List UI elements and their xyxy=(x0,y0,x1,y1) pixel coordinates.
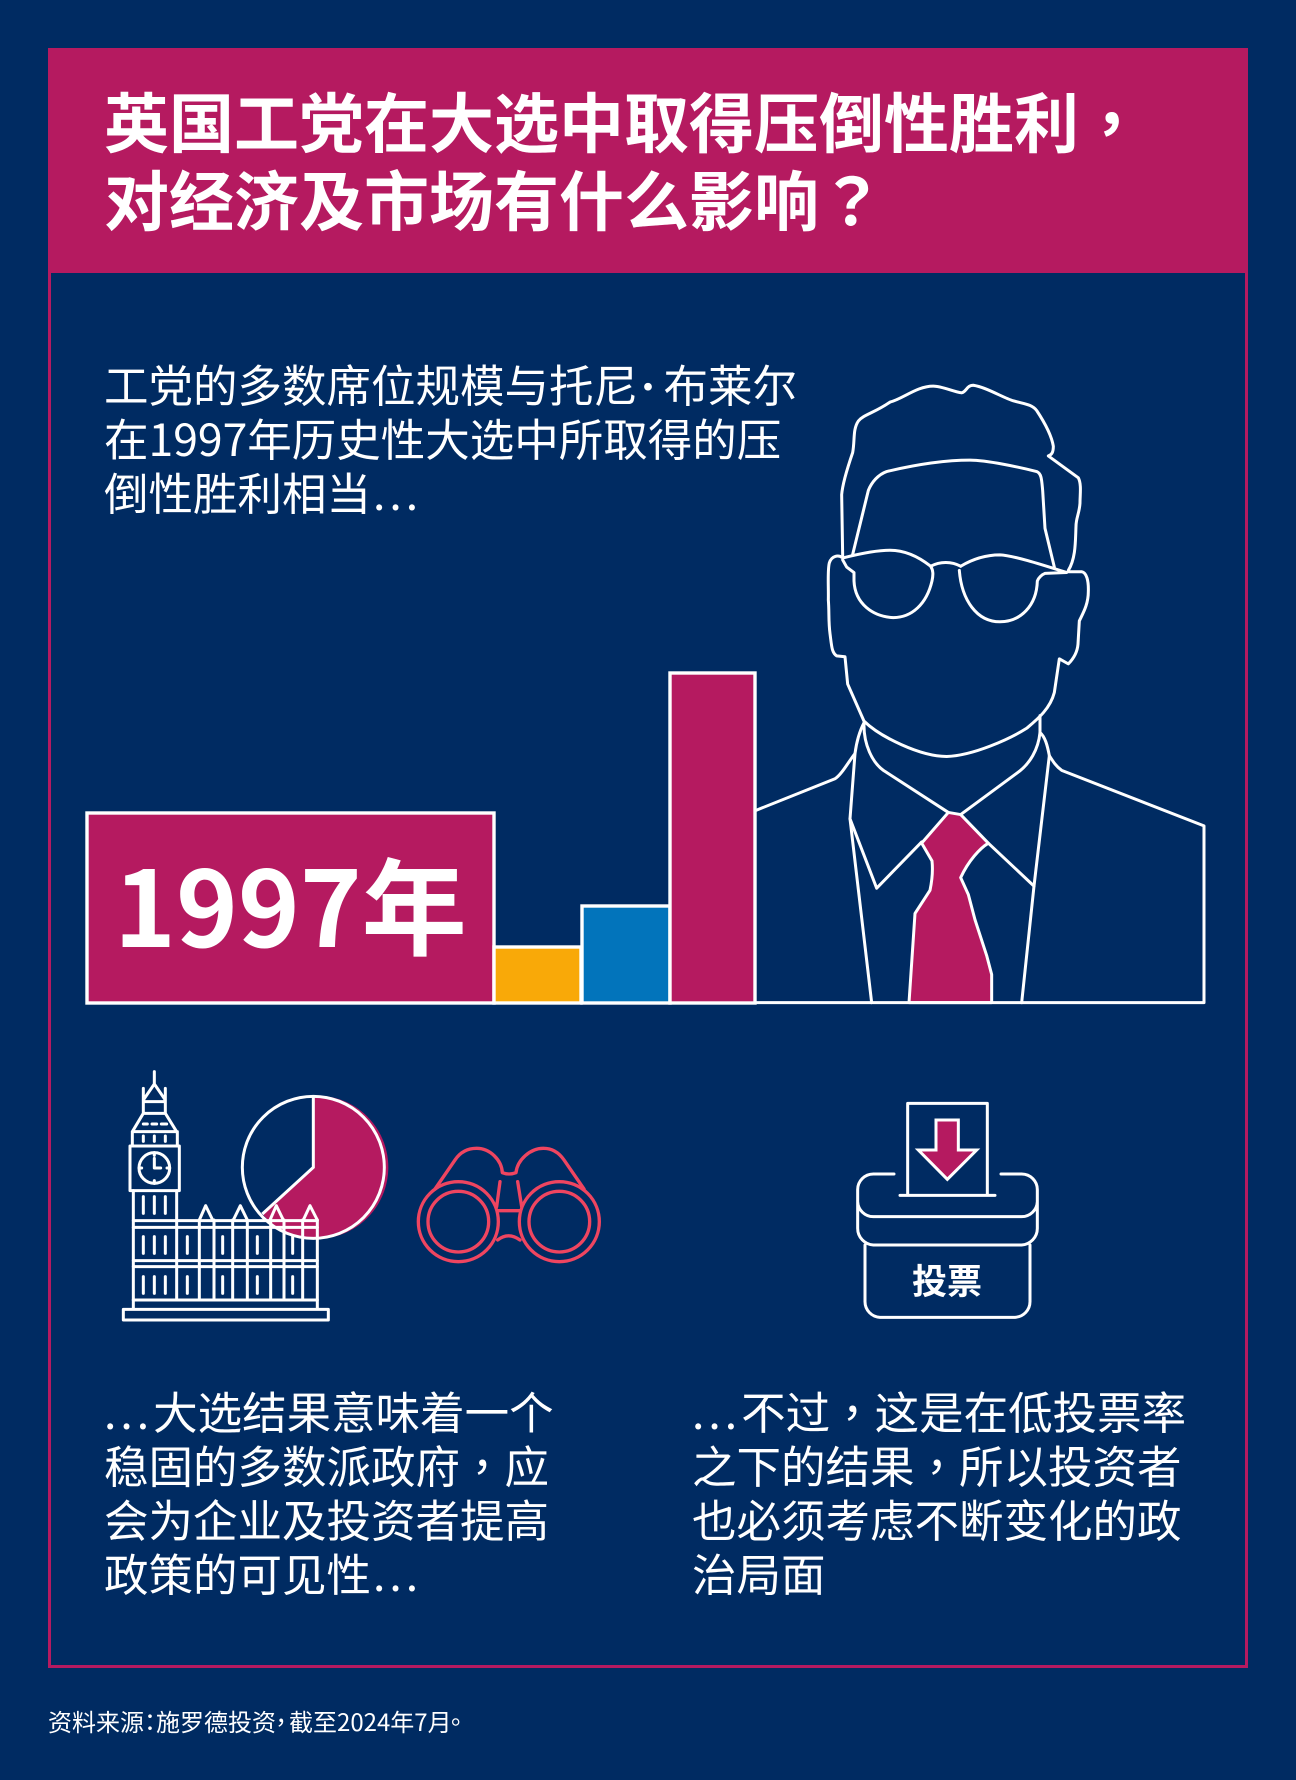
text block: left column: ...大选结果意味着一个 xyxy=(104,1377,554,1442)
text block: right column xyxy=(692,1377,1186,1604)
source note: 。 xyxy=(444,1703,468,1738)
bar: orange xyxy=(494,947,581,1003)
icon: pie chart xyxy=(242,1096,388,1239)
bar: magenta xyxy=(670,673,755,1003)
text block: left column: 会为企业及投资者提高 xyxy=(104,1485,549,1550)
text block: right column: ...不过，这是在低投票率 xyxy=(692,1377,1186,1442)
text block: right column: 之下的结果，所以投资者 xyxy=(692,1431,1182,1496)
title: 英国工党在大选中取得压倒性胜利， xyxy=(104,72,1144,166)
text block: intro xyxy=(104,350,797,523)
icon: ballot box xyxy=(858,1103,1037,1317)
bar chart: 1997 seats xyxy=(87,673,755,1003)
text block: intro: 倒性胜利相当... xyxy=(104,458,422,523)
text block: left column xyxy=(104,1377,554,1604)
text block: intro: 布莱尔 xyxy=(664,350,797,415)
text block: right column: 治局面 xyxy=(692,1539,826,1604)
source note: 资料来源 xyxy=(48,1703,144,1738)
source note: ： xyxy=(138,1703,162,1738)
source note: 截至2024年7月 xyxy=(289,1703,452,1738)
title xyxy=(104,72,1144,244)
source note: 施罗德投资 xyxy=(156,1703,276,1738)
source note: ， xyxy=(269,1703,293,1738)
header banner xyxy=(48,48,1248,273)
text block: intro: 工党的多数席位规模与托尼 xyxy=(104,350,638,415)
title: 对经济及市场有什么影响？ xyxy=(104,150,884,244)
icon: ballot paper with arrow xyxy=(900,1103,995,1195)
icon: Big Ben and parliament xyxy=(123,1072,328,1320)
text block: left column: 政策的可见性... xyxy=(104,1539,422,1604)
text block: intro: · xyxy=(630,359,666,411)
bar: 1997 label box xyxy=(87,813,494,1003)
illustration: man with glasses and tie xyxy=(755,385,1204,1003)
text block: left column: 稳固的多数派政府，应 xyxy=(104,1431,549,1496)
text block: right column: 也必须考虑不断变化的政 xyxy=(692,1485,1182,1550)
text block: intro: 在1997年历史性大选中所取得的压 xyxy=(104,404,781,469)
icon: binoculars xyxy=(418,1148,599,1262)
bar: 1997 label box: 1997年 xyxy=(114,826,467,978)
bar: blue xyxy=(582,906,670,1003)
label: ballot box: 投票 xyxy=(912,1254,982,1305)
